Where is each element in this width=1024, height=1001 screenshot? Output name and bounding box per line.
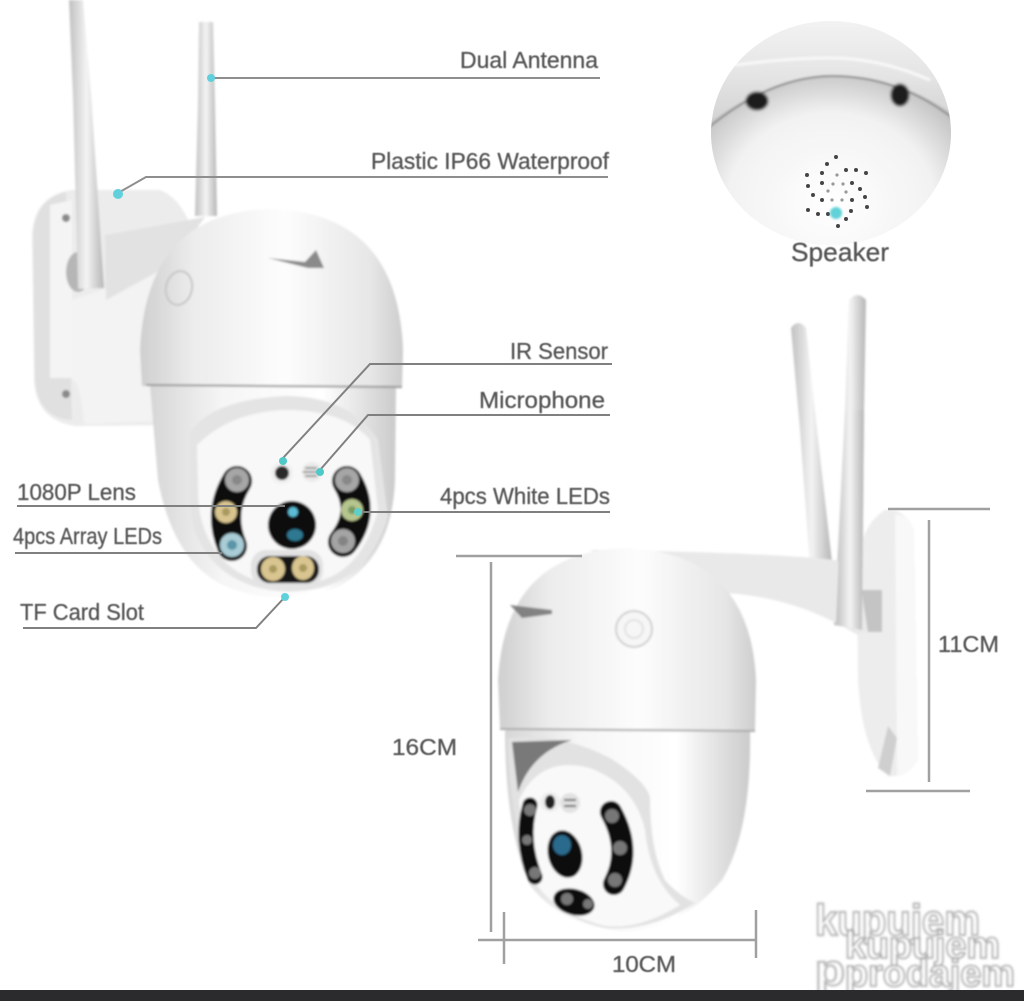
watermark [815, 896, 1015, 995]
microphone [560, 793, 580, 813]
speaker holes [805, 155, 869, 228]
label: IR Sensor: IR Sensor [510, 338, 608, 364]
dimension: 10CM [478, 910, 757, 977]
microphone [302, 462, 322, 482]
right camera [498, 295, 918, 932]
label: Dual Antenna: Dual Antenna [460, 47, 598, 73]
left LEDs [522, 804, 541, 879]
lens [543, 827, 587, 881]
label: 4pcs White LEDs [354, 483, 610, 516]
label: 4pcs White LEDs: 4pcs White LEDs [440, 483, 610, 509]
dimension: 11CM [866, 509, 999, 791]
wall plate [857, 510, 918, 776]
IR sensor [271, 462, 293, 484]
antenna left [69, 0, 104, 289]
camera body [498, 548, 756, 932]
label: TF Card Slot [20, 593, 289, 628]
speaker label: Speaker [791, 237, 889, 267]
watermark: p [815, 946, 845, 995]
camera face [508, 737, 695, 928]
right LEDs [331, 468, 363, 553]
speaker pointer [830, 207, 842, 219]
IR sensor [540, 792, 560, 812]
label: TF Card Slot: TF Card Slot [20, 599, 145, 625]
watermark: prodajem [845, 953, 1015, 995]
bottom LEDs [550, 884, 598, 920]
camera body [140, 209, 403, 597]
watermark: kupujem [815, 896, 980, 945]
antennas [791, 295, 866, 630]
label: Microphone: Microphone [479, 387, 605, 413]
watermark: kupujem [845, 925, 1000, 967]
bottom LEDs [251, 550, 323, 586]
label: Plastic IP66 Waterproof [113, 148, 610, 199]
dimension: 11CM: 11CM [938, 631, 999, 657]
dimension: 10CM: 10CM [612, 951, 676, 977]
label: Microphone [316, 387, 610, 476]
antenna right [195, 22, 217, 216]
right LEDs [605, 809, 627, 887]
front antenna [836, 410, 864, 630]
left camera [32, 0, 403, 597]
dimension: 16CM: 16CM [392, 734, 457, 760]
bottom bar [0, 990, 1024, 1001]
mounting arm [590, 550, 868, 634]
label: 1080P Lens: 1080P Lens [17, 479, 136, 505]
label: Dual Antenna [207, 47, 600, 82]
speaker dome [711, 21, 951, 230]
label: Plastic IP66 Waterproof: Plastic IP66 Waterproof [371, 148, 610, 174]
left LEDs [215, 468, 249, 557]
label: IR Sensor [279, 338, 612, 465]
speaker detail [711, 21, 951, 268]
dimension: 16CM [392, 556, 582, 932]
lens [268, 501, 316, 549]
camera face [190, 396, 388, 592]
wall mount plate [32, 190, 205, 426]
label: 4pcs Array LEDs: 4pcs Array LEDs [13, 523, 162, 549]
